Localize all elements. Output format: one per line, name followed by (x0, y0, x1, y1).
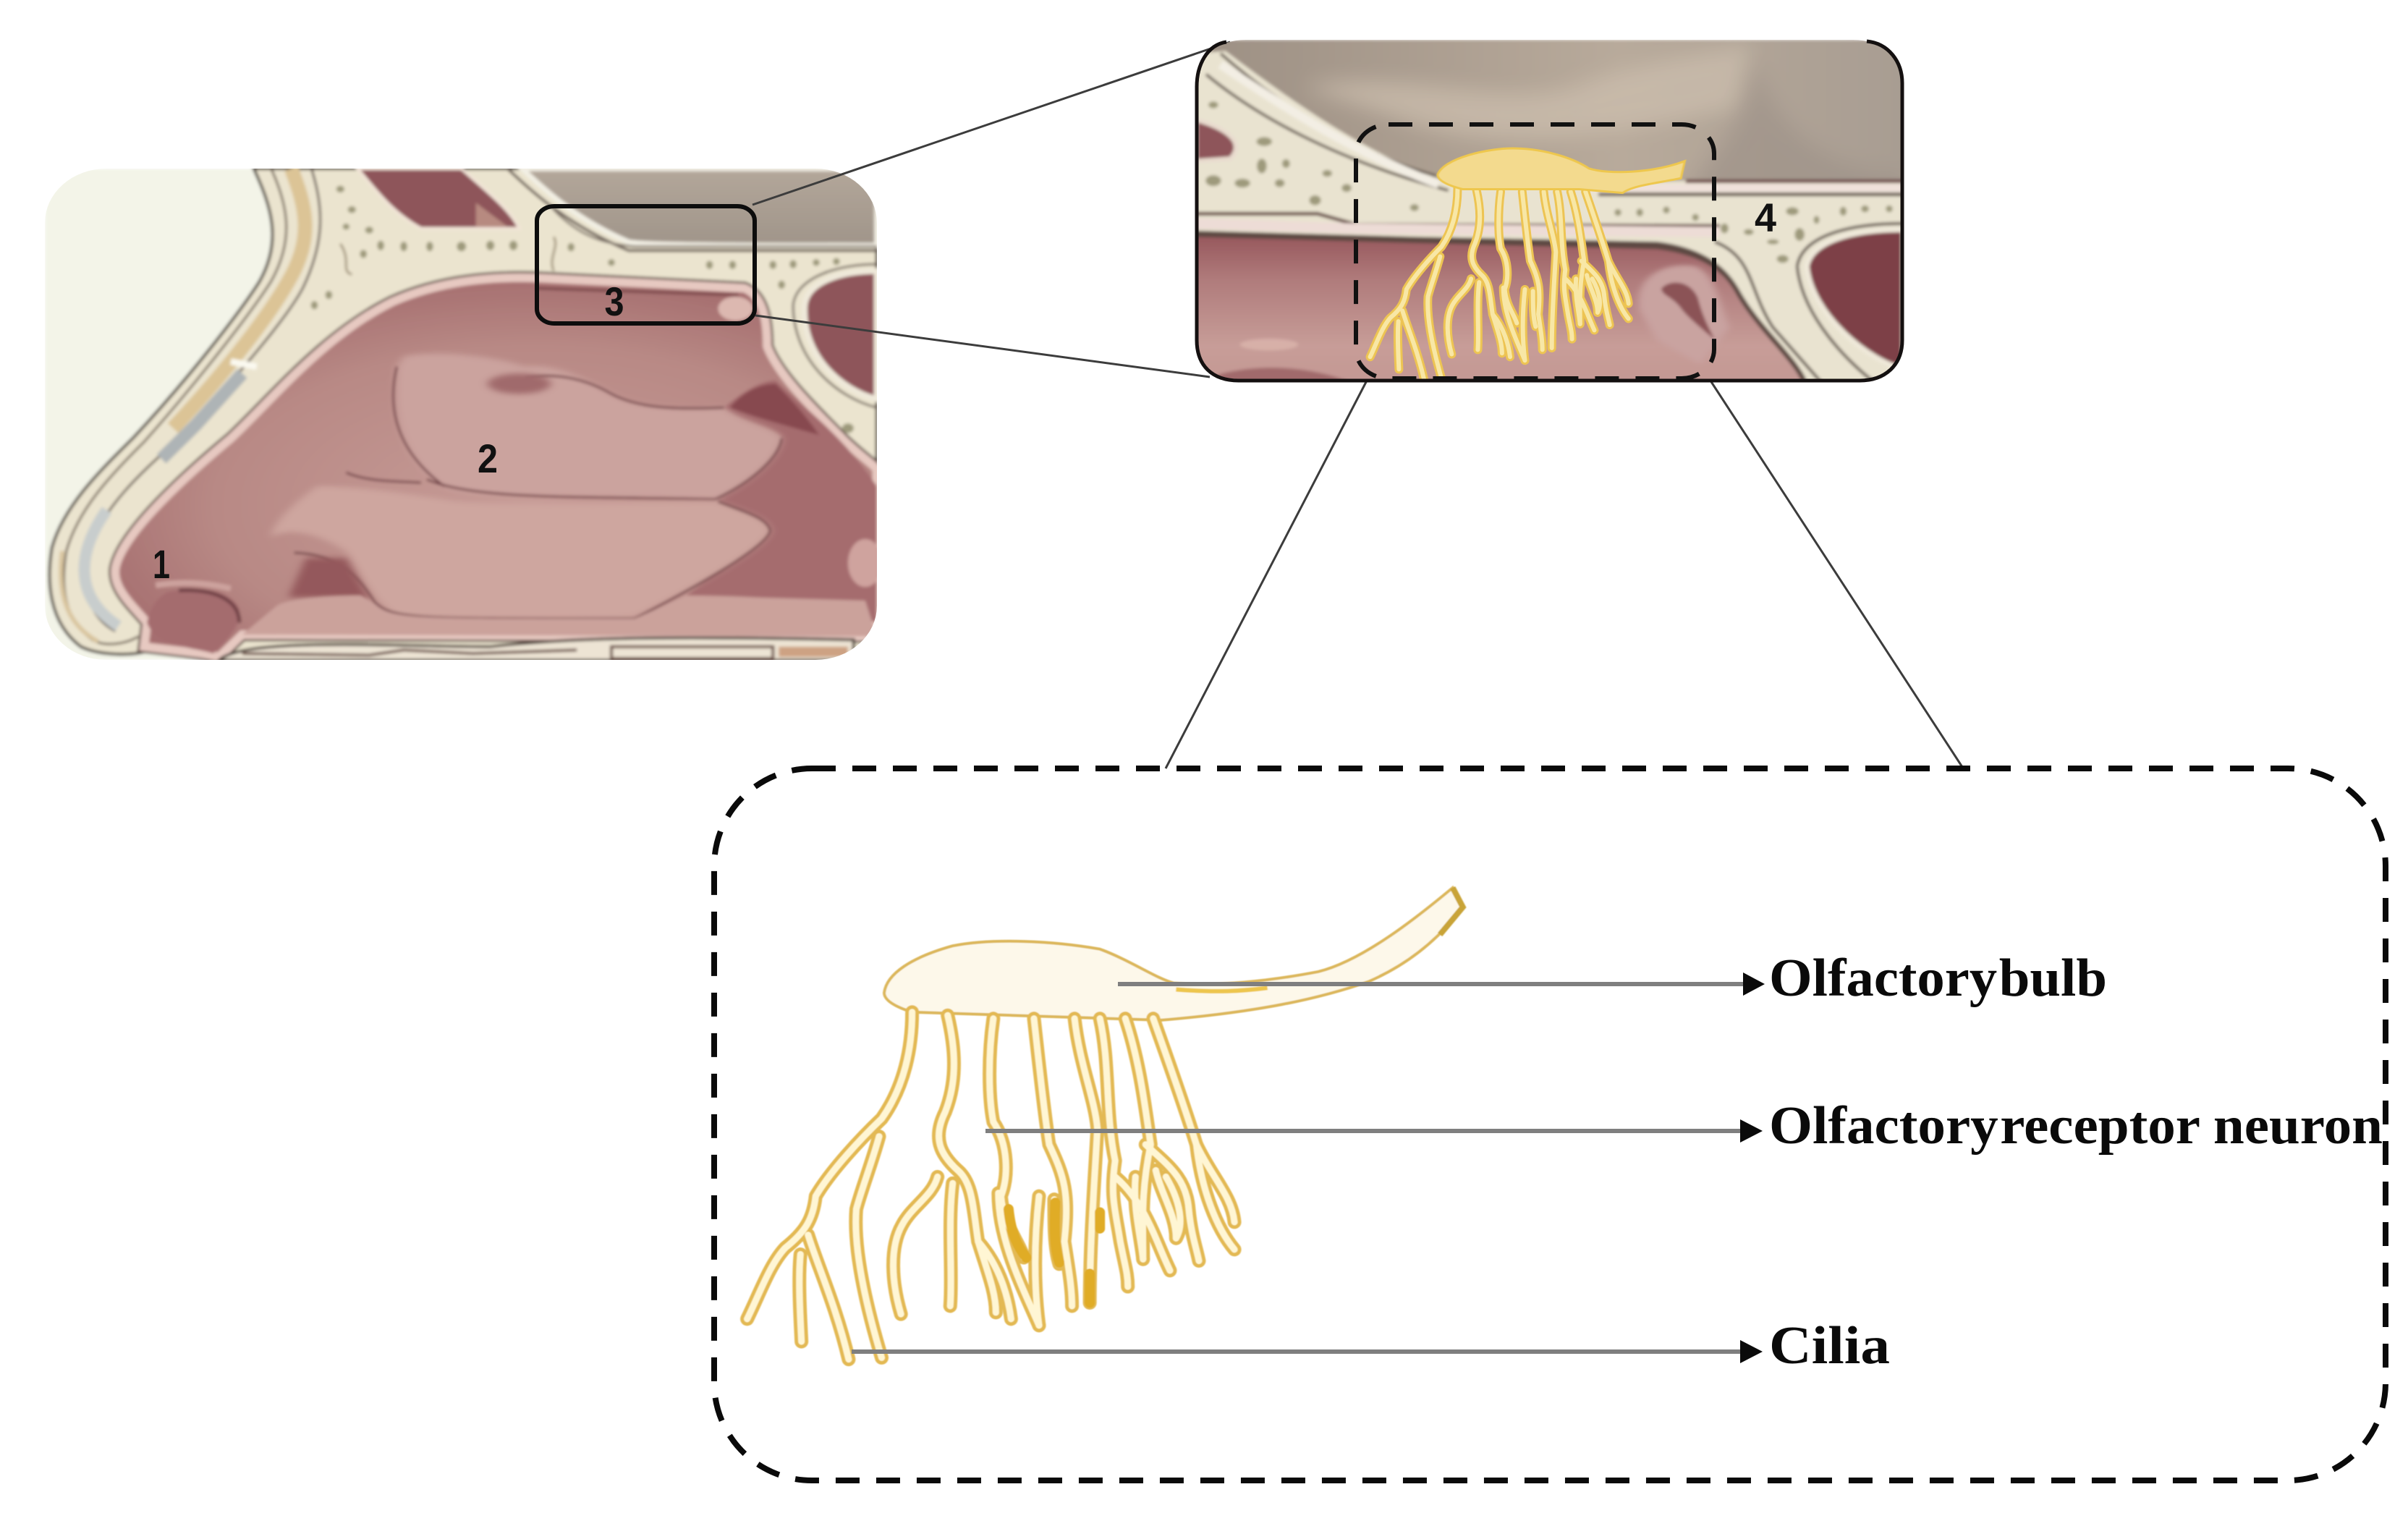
number 4: 4 (1755, 195, 1776, 240)
arrow: to cilia (852, 1340, 1763, 1363)
label: cilia: Cilia (1769, 1316, 1890, 1376)
arrow: to olfactory bulb (1118, 972, 1765, 996)
dashed box: neuron region (1356, 124, 1714, 378)
panel: olfactory region close-up (1195, 40, 1904, 383)
panel: magnified neuron (714, 768, 2386, 1480)
neuron overlay: dendrites (1370, 188, 1629, 379)
connector: top panel to magnified panel, right (1708, 376, 1962, 767)
connector: top panel to magnified panel, left (1166, 381, 1367, 768)
number 3: 3 (605, 279, 624, 324)
neuron overlay: bulb (1438, 148, 1684, 193)
dashed frame (714, 768, 2386, 1480)
connector: detail box 3 to top panel, upper (752, 42, 1230, 205)
number 1: 1 (153, 541, 170, 587)
label: olfactory bulb: Olfactory bulb (1769, 949, 2107, 1008)
detail box: region 3 (537, 206, 755, 323)
connector: detail box 3 to top panel, lower (755, 315, 1210, 377)
number 2: 2 (478, 436, 498, 481)
panel border (1197, 41, 1902, 381)
label: olfactory receptor neuron: Olfactory receptor neuron (1769, 1096, 2383, 1156)
arrow: to olfactory receptor neuron (985, 1119, 1763, 1143)
olfactory neuron illustration (747, 888, 1463, 1360)
panel: nasal cavity anatomy (45, 169, 883, 661)
